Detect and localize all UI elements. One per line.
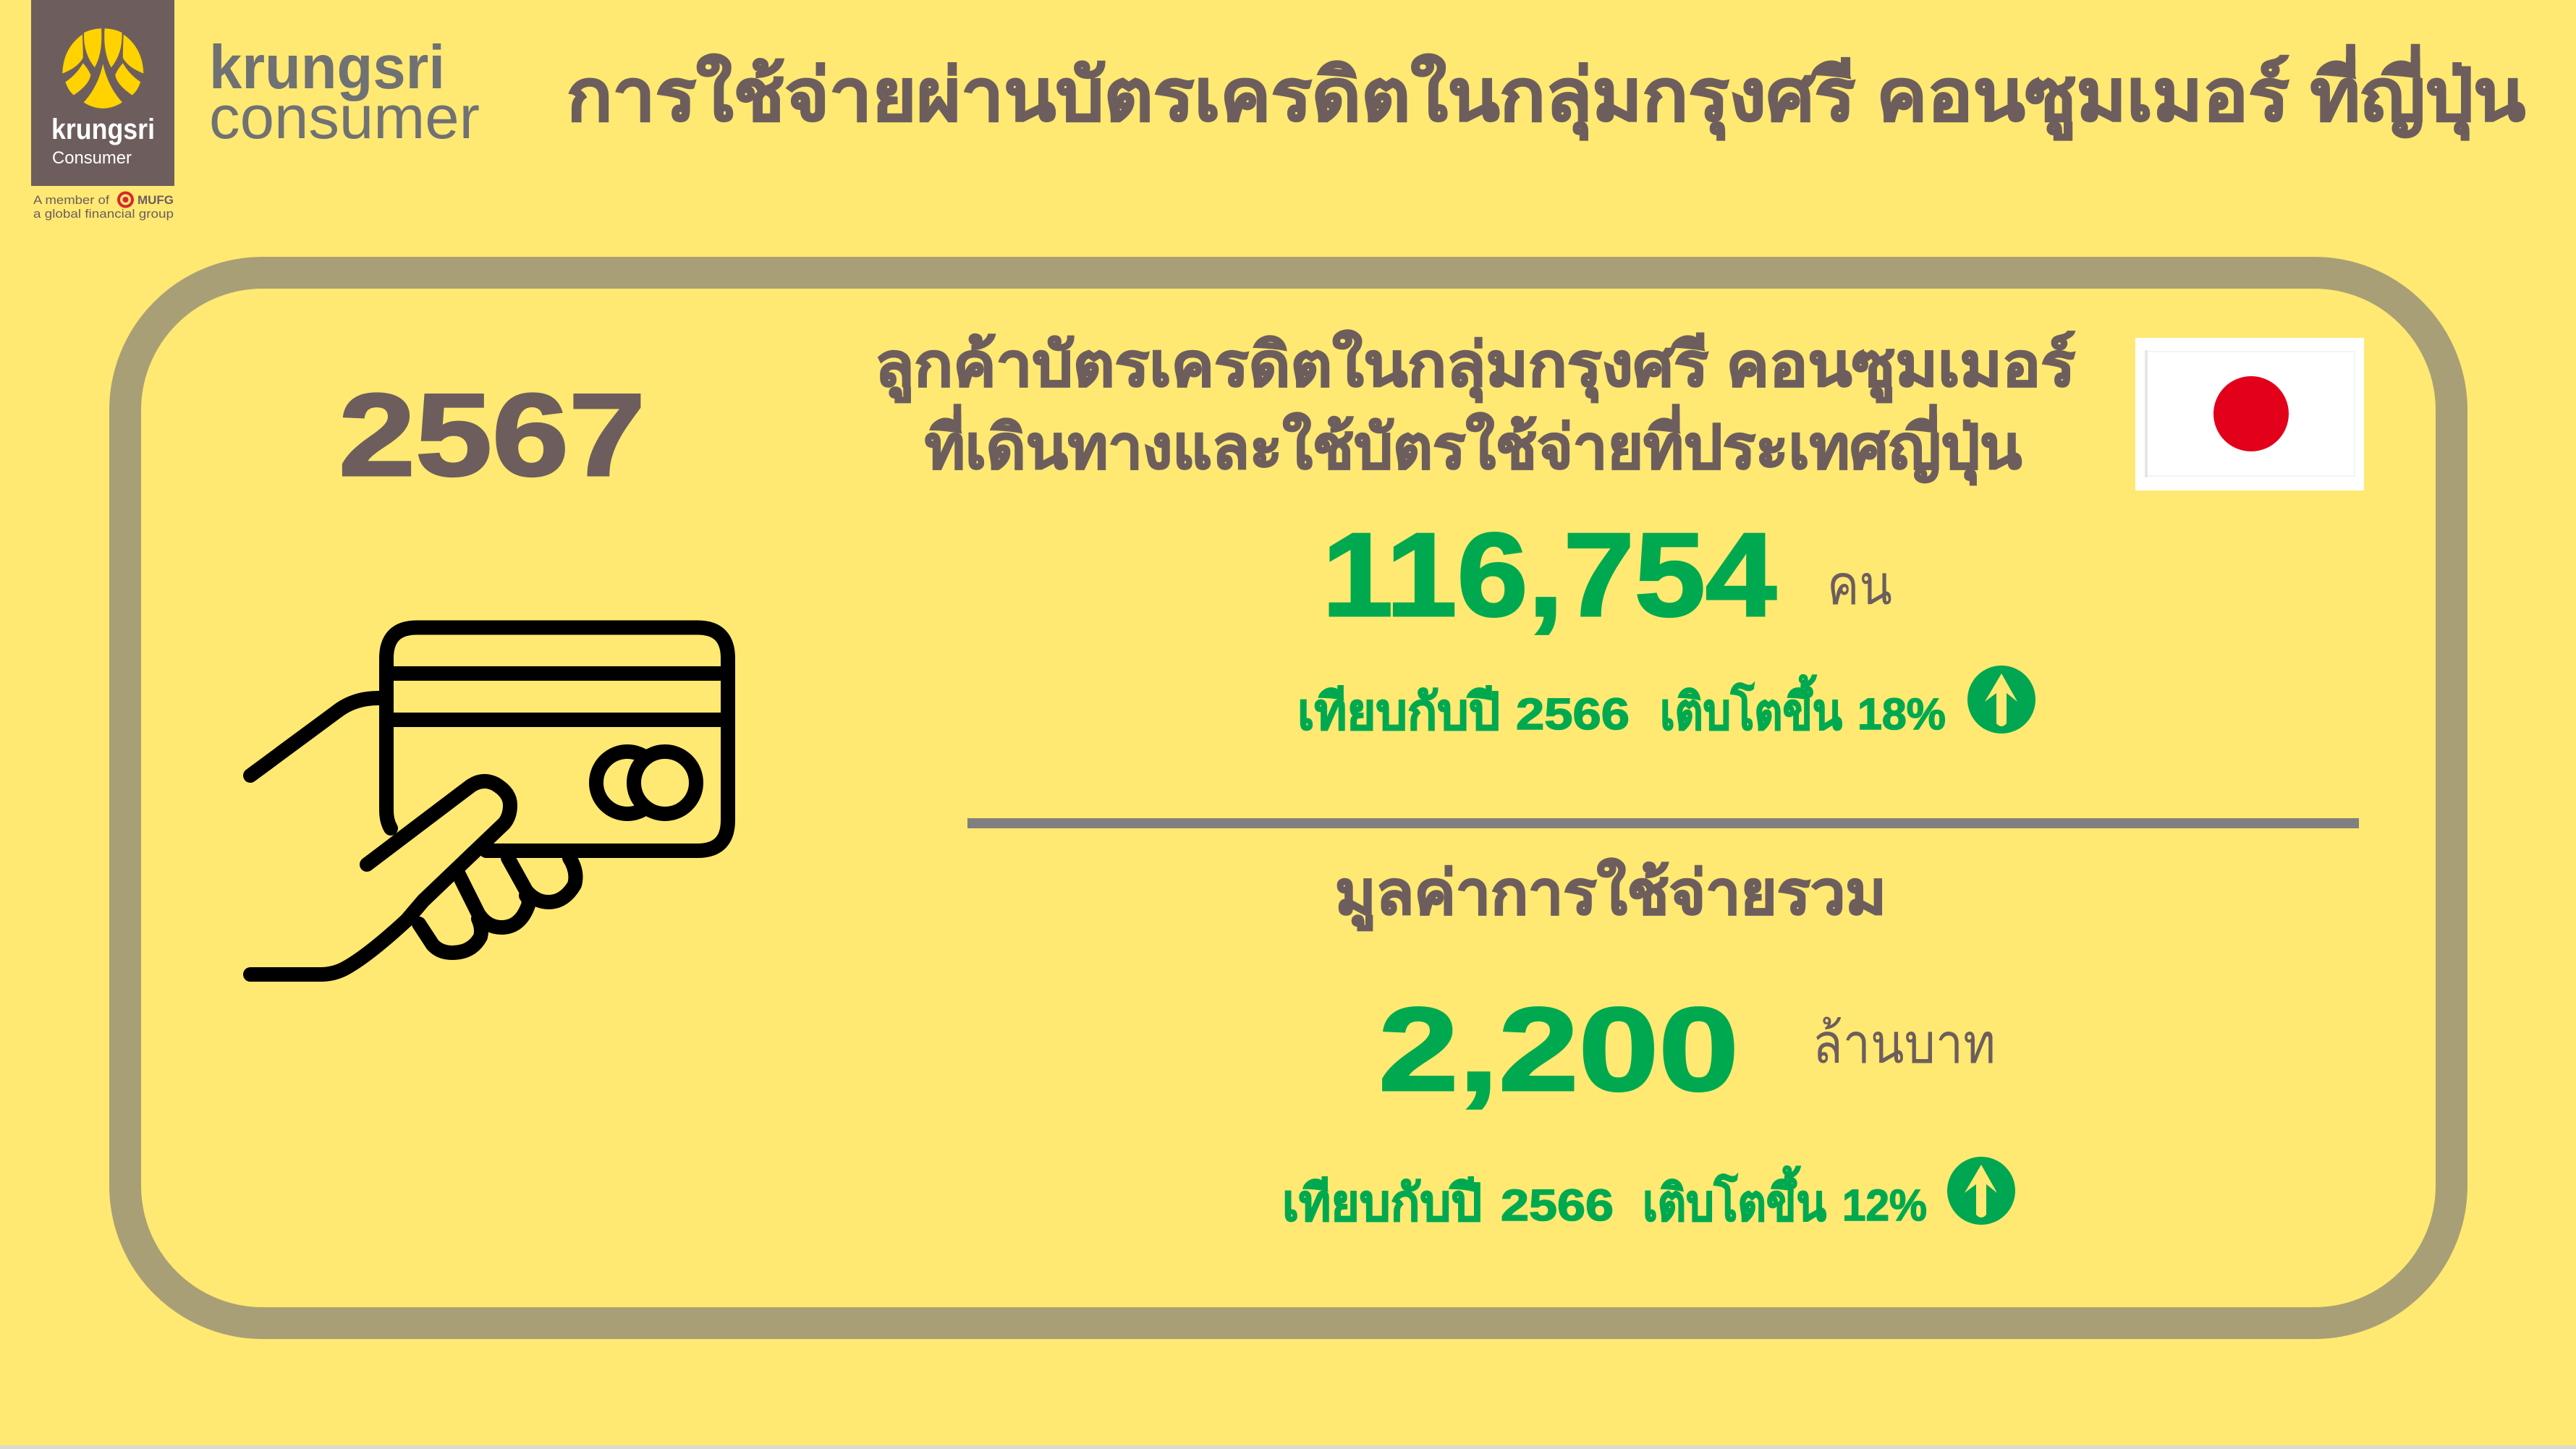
- spending growth note: 12%: [1842, 1181, 1927, 1230]
- panel: rounded frame: [125, 273, 2452, 1323]
- spending value: 2,200: [1378, 983, 1739, 1116]
- year heading: 2567: [339, 370, 645, 501]
- customers heading line 2: ที่เดินทางและใช้บัตรใช้จ่ายที่ประเทศญี่ปุ่น: [925, 404, 2022, 485]
- customer growth note: 18%: [1857, 689, 1946, 739]
- spending growth note: [1282, 1165, 1927, 1231]
- logo wordmark: krungsri: [51, 114, 155, 145]
- logo block: krungsri consumer emblem: [31, 0, 174, 221]
- logo sub-wordmark: Consumer: [52, 148, 132, 168]
- spending growth note: เทียบกับปี: [1282, 1175, 1482, 1231]
- brand wordmark: consumer: consumer: [209, 83, 480, 151]
- icon: up arrow (spending): [1947, 1157, 2015, 1225]
- customers heading line 1: ลูกค้าบัตรเครดิตในกลุ่มกรุงศรี คอนซูมเมอร์: [875, 330, 2075, 403]
- icon: MUFG mark: [119, 192, 132, 207]
- MUFG label: MUFG: [137, 193, 174, 207]
- customer count: 116,754: [1322, 509, 1776, 641]
- icon: Japan flag: [2135, 338, 2364, 490]
- icon: krungsri emblem: [62, 28, 143, 109]
- customer growth note: 2566: [1516, 689, 1630, 739]
- customer growth note: เทียบกับปี: [1297, 684, 1500, 740]
- spending heading: มูลค่าการใช้จ่ายรวม: [1335, 858, 1886, 931]
- spending growth note: 2566: [1501, 1181, 1614, 1230]
- brand wordmark: krungsri: krungsri: [209, 33, 445, 102]
- group tagline: a global financial group: [33, 207, 174, 221]
- customer growth note: [1297, 674, 1946, 740]
- spending growth note: เติบโตขึ้น: [1643, 1165, 1826, 1231]
- spending unit: ล้านบาท: [1813, 1014, 1996, 1075]
- customer unit: คน: [1827, 555, 1892, 616]
- member tagline: A member of: [33, 193, 109, 207]
- title: การใช้จ่ายผ่านบัตรเครดิตในกลุ่มกรุงศรี คอนซูมเมอร์ ที่ญี่ปุ่น: [567, 44, 2525, 140]
- icon: hand holding credit card: [250, 628, 728, 974]
- customer growth note: เติบโตขึ้น: [1660, 674, 1842, 740]
- icon: up arrow (customers): [1967, 666, 2035, 734]
